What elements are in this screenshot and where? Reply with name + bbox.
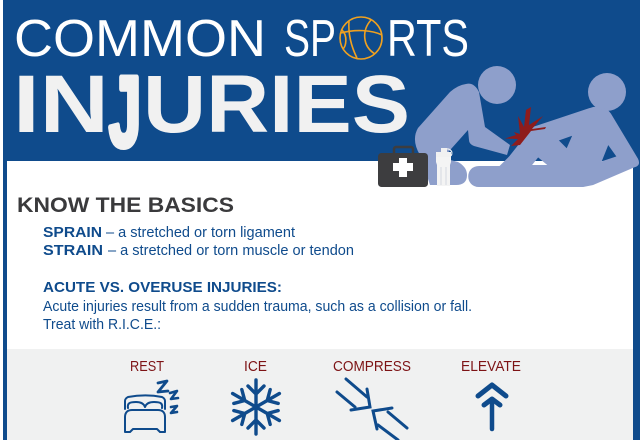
subheading: acute vs overuse: ACUTE VS. OVERUSE INJURIES: (43, 279, 282, 296)
text block: acute injuries: Treat with R.I.C.E.: (43, 316, 161, 333)
title: injuries: J (109, 56, 141, 167)
icon: basketball (340, 17, 382, 59)
icon: compress arrows (337, 379, 407, 440)
title: injuries: URIES (143, 59, 410, 150)
icon: injury burst (505, 107, 546, 146)
figure: helper (415, 66, 516, 185)
icon: bed with zzz (125, 381, 178, 432)
label: ice: ICE (244, 358, 267, 375)
title: common sports: RTS (387, 10, 469, 68)
text block: acute injuries: Acute injuries result from a sudden trauma, such as a collision or fall. (43, 298, 472, 315)
definition: sprain: SPRAIN (43, 224, 102, 241)
panel: R.I.C.E. background (7, 349, 633, 440)
figure: injured athlete (469, 73, 638, 186)
definition: sprain: – a stretched or torn ligament (106, 224, 296, 241)
title: common sports: SP (284, 10, 336, 68)
definition: strain: – a stretched or torn muscle or tendon (108, 242, 354, 259)
title: injuries: IN (13, 59, 109, 150)
text block: acute injuries (43, 298, 472, 333)
label: rest: REST (130, 358, 164, 375)
icon: snowflake (229, 380, 283, 434)
title: common sports: COMMON (14, 10, 266, 68)
icon: first aid kit (378, 147, 428, 187)
icon: elevate arrow (478, 385, 506, 429)
definition: strain: STRAIN (43, 242, 103, 259)
label: compress: COMPRESS (333, 358, 411, 375)
title: common sports (14, 10, 469, 68)
label: elevate: ELEVATE (461, 358, 521, 375)
heading: know the basics: KNOW THE BASICS (17, 193, 234, 217)
icon: water bottle (436, 148, 452, 186)
title: injuries (13, 56, 410, 167)
